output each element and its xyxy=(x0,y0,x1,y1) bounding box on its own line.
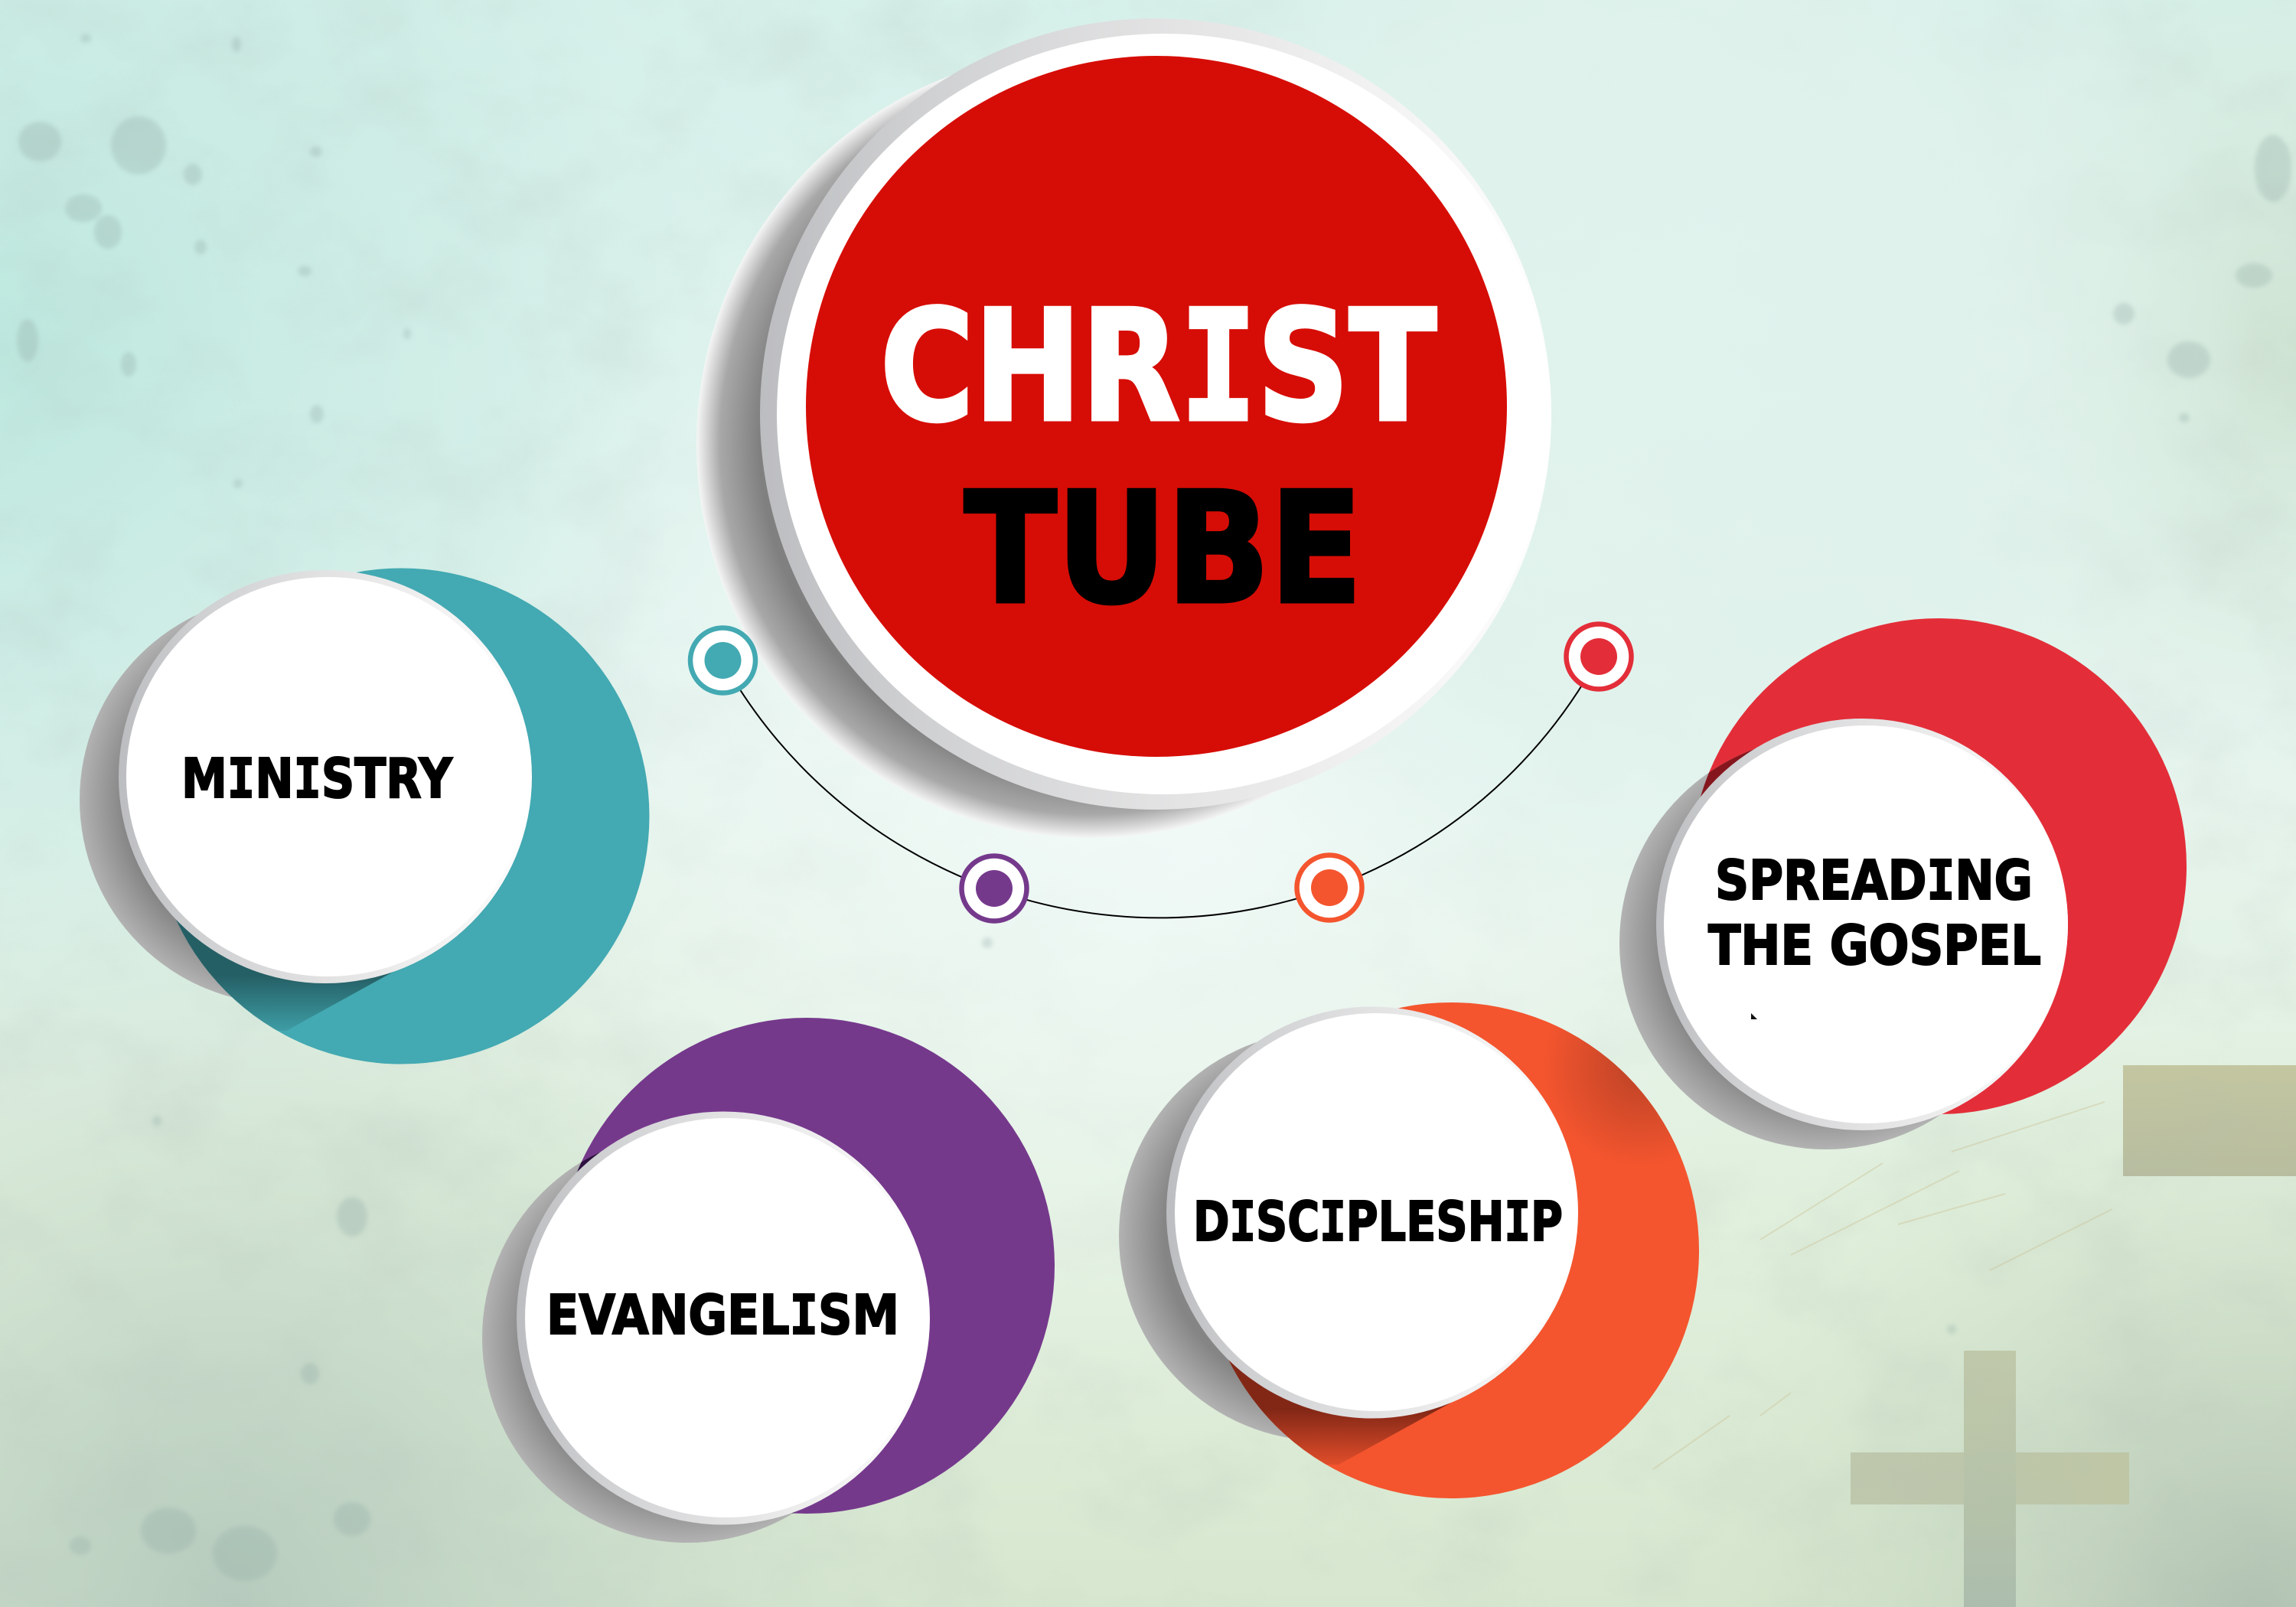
ministry teal disc xyxy=(153,568,649,1064)
discipleship rim xyxy=(1166,1007,1578,1419)
ministry white face xyxy=(126,577,529,976)
title: TUBE: TUBE xyxy=(964,460,1362,638)
badge: Discipleship xyxy=(1119,980,1714,1498)
stray cursor speck xyxy=(1751,1013,1757,1019)
badge: Evangelism xyxy=(482,1018,1055,1543)
marker: purple xyxy=(961,856,1027,921)
ministry rim xyxy=(119,570,532,983)
evangelism label: EVANGELISM xyxy=(546,1283,899,1347)
marker: orange xyxy=(1296,856,1362,920)
marker: teal xyxy=(690,627,755,693)
spreading disc shade sliver xyxy=(1619,736,2033,1149)
badge: Spreading the Gospel xyxy=(1619,618,2187,1149)
evangelism purple disc xyxy=(559,1018,1055,1514)
title: CHRIST: CHRIST xyxy=(880,278,1437,456)
spreading rim xyxy=(1656,719,2068,1130)
background cross: top-right partial xyxy=(2123,1065,2296,1176)
main circle drop shadow xyxy=(696,50,1485,838)
spreading label xyxy=(1708,849,2041,977)
discipleship shadow xyxy=(1119,1031,1529,1441)
arc connector xyxy=(722,657,1599,918)
discipleship white face xyxy=(1175,1013,1577,1411)
label line two: THE GOSPEL xyxy=(1708,914,2041,977)
label line one: SPREADING xyxy=(1715,849,2033,912)
spreading white face xyxy=(1664,725,2068,1123)
evangelism disc shade sliver xyxy=(577,1151,797,1514)
main circle: Christ Tube xyxy=(696,18,1551,838)
spreading shadow xyxy=(1619,736,2033,1149)
evangelism white face xyxy=(525,1118,928,1517)
discipleship disc shade xyxy=(1229,1031,1676,1465)
main circle rim xyxy=(760,18,1551,810)
badge: Ministry xyxy=(80,568,649,1064)
main circle red disc xyxy=(806,56,1507,757)
spreading red disc xyxy=(1691,618,2187,1114)
ministry label: MINISTRY xyxy=(181,747,453,810)
marker: red xyxy=(1566,624,1632,689)
discipleship label: DISCIPLESHIP xyxy=(1193,1190,1563,1253)
ministry disc shade xyxy=(176,920,393,1031)
evangelism shadow xyxy=(482,1133,892,1543)
main circle white ring xyxy=(777,34,1550,794)
evangelism rim xyxy=(517,1111,930,1524)
discipleship orange disc xyxy=(1203,1002,1699,1498)
background cross: bottom-right xyxy=(1851,1351,2129,1607)
ministry shadow xyxy=(80,595,488,1004)
